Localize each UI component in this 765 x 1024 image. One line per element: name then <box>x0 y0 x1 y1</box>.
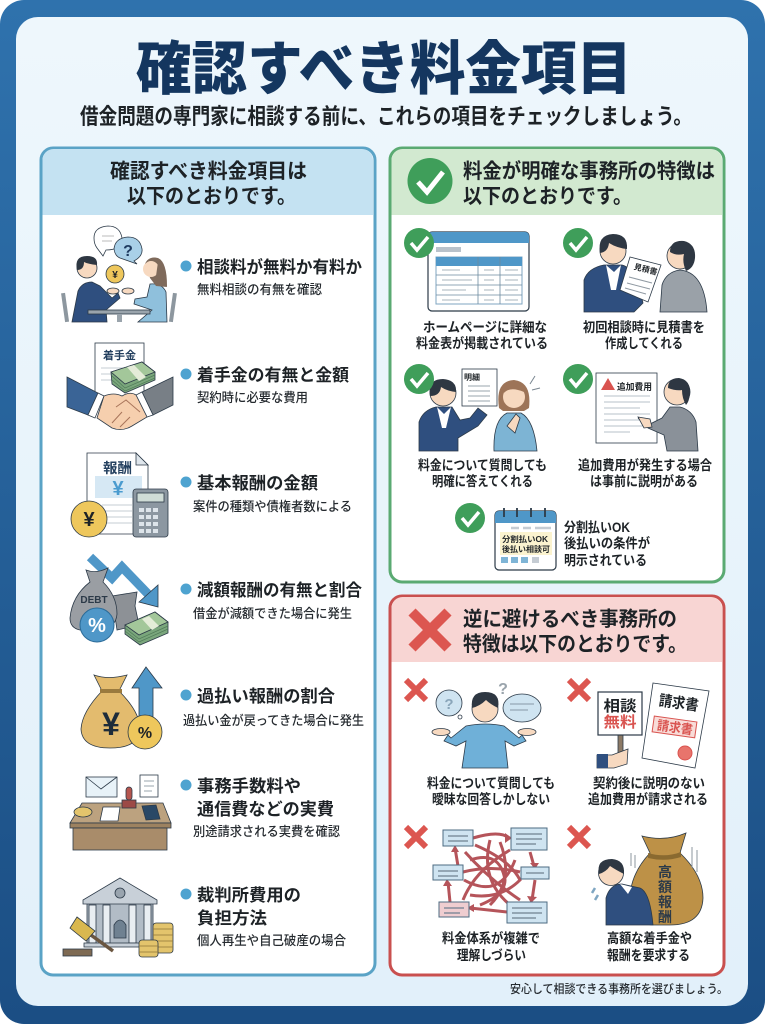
item: reduction fee: 借金が減額できた場合に発生 <box>193 606 352 621</box>
caption: additional cost explained <box>578 457 712 489</box>
item: consultation fee: 相談料が無料か有料か <box>197 257 362 277</box>
caption: payment terms: 分割払いOK <box>564 519 630 535</box>
icon: consultation: ? <box>123 243 133 260</box>
icon: courthouse and gavel <box>63 878 173 957</box>
icon: overpayment money bag: % <box>138 725 152 742</box>
caption: unexplained charges: 契約後に説明のない <box>593 775 705 791</box>
icon: basic fee document: ¥ <box>83 509 95 531</box>
caption: detailed fee table <box>416 319 548 351</box>
icon: fee table web page <box>428 232 529 311</box>
panel: fee items <box>41 148 375 975</box>
item: consultation fee <box>180 257 362 297</box>
icon: additional cost notice: 追加費用 <box>617 381 652 392</box>
icon: large check <box>408 158 452 204</box>
item: court costs: 負担方法 <box>197 908 267 928</box>
panel heading: clear-fee offices: 以下のとおりです。 <box>463 185 632 208</box>
icon: huge money bag <box>592 833 703 925</box>
item: consultation fee: 無料相談の有無を確認 <box>197 282 322 297</box>
item: overpayment fee: 過払い金が戻ってきた場合に発生 <box>183 713 364 728</box>
icon: consultation: ¥ <box>112 270 118 281</box>
item: court costs <box>180 886 346 948</box>
item: reduction fee: 減額報酬の有無と割合 <box>197 581 362 600</box>
panel: clear-fee offices <box>390 148 724 582</box>
item: basic fee <box>180 473 352 514</box>
caption: payment terms: 後払いの条件が <box>564 535 650 551</box>
icon: advisor hands estimate <box>584 234 707 312</box>
icon: debt reduction: DEBT <box>80 595 108 606</box>
title: 確認すべき料金項目 <box>136 37 632 102</box>
caption: complex fee system <box>442 930 540 963</box>
X 3 <box>406 827 426 847</box>
caption: detailed fee table: 料金表が掲載されている <box>416 335 548 351</box>
caption: payment terms <box>564 519 650 568</box>
icon: clear answers <box>419 369 540 451</box>
panel heading: fee items: 以下のとおりです。 <box>127 185 296 208</box>
X 1 <box>406 680 426 700</box>
caption: clear answers <box>418 457 547 489</box>
caption: high fees: 報酬を要求する <box>607 947 690 963</box>
caption: payment terms: 明示されている <box>564 553 647 568</box>
icon: free sign and invoice <box>597 683 709 768</box>
icon: office desk <box>70 775 171 850</box>
check 1 <box>404 228 434 258</box>
icon: huge money bag: 額 <box>658 879 672 895</box>
icon: debt reduction <box>70 557 168 645</box>
icon: debt reduction: % <box>88 615 106 637</box>
caption: additional cost explained: 追加費用が発生する場合 <box>578 457 712 473</box>
icon: advisor hands estimate: 見積書 <box>633 261 659 277</box>
panel heading: fee items: 確認すべき料金項目は <box>110 160 307 183</box>
caption: vague answers: 料金について質問しても <box>427 775 555 791</box>
caption: complex fee system: 理解しづらい <box>457 948 526 963</box>
item: expenses: 別途請求される実費を確認 <box>193 824 340 839</box>
icon: free sign and invoice: 無料 <box>604 713 636 731</box>
caption: clear answers: 料金について質問しても <box>418 457 547 473</box>
item: expenses <box>180 776 340 839</box>
item: reduction fee <box>180 581 362 621</box>
item: court costs: 裁判所費用の <box>197 886 301 905</box>
caption: unexplained charges: 追加費用が請求される <box>588 791 708 807</box>
item: expenses: 通信費などの実費 <box>197 800 334 819</box>
icon: overpayment money bag <box>81 667 162 749</box>
check 4 <box>563 364 593 394</box>
panel: offices to avoid <box>390 596 724 975</box>
panel heading: offices to avoid: 逆に避けるべき事務所の <box>463 608 677 631</box>
icon: installment calendar: 分割払いOK <box>502 534 548 544</box>
icon: retainer handshake <box>67 343 173 430</box>
icon: free sign and invoice: 相談 <box>604 697 636 715</box>
X 2 <box>569 680 589 700</box>
item: retainer: 着手金の有無と金額 <box>197 365 349 385</box>
icon: huge money bag: 報 <box>658 894 672 910</box>
icon: basic fee document: ¥ <box>112 478 124 500</box>
caption: detailed fee table: ホームページに詳細な <box>423 319 547 335</box>
icon: installment calendar <box>495 508 556 570</box>
caption: complex fee system: 料金体系が複雑で <box>442 930 540 946</box>
item: overpayment fee: 過払い報酬の割合 <box>197 687 335 706</box>
panel heading: clear-fee offices: 料金が明確な事務所の特徴は <box>463 159 715 183</box>
panel heading: offices to avoid: 特徴は以下のとおりです。 <box>463 633 687 656</box>
icon: confused person: ? <box>498 681 508 698</box>
item: basic fee: 基本報酬の金額 <box>197 473 318 493</box>
X 4 <box>569 827 589 847</box>
check 2 <box>563 228 593 258</box>
item: basic fee: 案件の種類や債権者数による <box>193 499 352 514</box>
icon: installment calendar: 後払い相談可 <box>502 544 550 554</box>
item: overpayment fee <box>180 687 364 728</box>
caption: clear answers: 明確に答えてくれる <box>432 473 533 489</box>
icon: basic fee document: 報酬 <box>103 460 132 476</box>
check 5 <box>455 503 485 533</box>
icon: confused person <box>432 681 541 768</box>
caption: estimate at first consultation: 初回相談時に見積書を <box>583 319 705 335</box>
icon: large X <box>412 612 448 648</box>
icon: huge money bag: 酬 <box>658 909 672 925</box>
item: retainer: 契約時に必要な費用 <box>197 390 308 405</box>
caption: unexplained charges <box>588 775 708 807</box>
item: retainer <box>180 365 349 405</box>
panel heading: fee items <box>110 160 307 208</box>
footer note: 安心して相談できる事務所を選びましょう。 <box>510 981 728 996</box>
icon: retainer handshake: 着手金 <box>103 348 136 362</box>
icon: consultation <box>61 226 177 322</box>
caption: estimate at first consultation <box>583 319 705 351</box>
caption: high fees: 高額な着手金や <box>607 930 692 946</box>
icon: huge money bag: 高 <box>658 864 672 880</box>
icon: clear answers: 明細 <box>464 372 480 382</box>
caption: additional cost explained: は事前に説明がある <box>590 473 698 489</box>
caption: estimate at first consultation: 作成してくれる <box>605 335 683 351</box>
panel heading: offices to avoid <box>463 608 687 656</box>
icon: tangled fee system <box>433 828 549 923</box>
caption: vague answers <box>427 775 555 807</box>
item: expenses: 事務手数料や <box>197 776 301 796</box>
icon: free sign and invoice: 請求書 <box>658 691 700 715</box>
check 3 <box>404 364 434 394</box>
icon: confused person: ? <box>444 696 454 713</box>
icon: overpayment money bag: ¥ <box>102 706 120 742</box>
icon: basic fee document <box>71 453 168 537</box>
caption: vague answers: 曖昧な回答しかしない <box>432 791 550 807</box>
icon: additional cost notice <box>596 373 698 451</box>
caption: high fees <box>607 930 692 963</box>
panel heading: clear-fee offices <box>463 159 715 208</box>
item: court costs: 個人再生や自己破産の場合 <box>197 933 346 948</box>
icon: free sign and invoice: 請求書 <box>656 718 694 737</box>
